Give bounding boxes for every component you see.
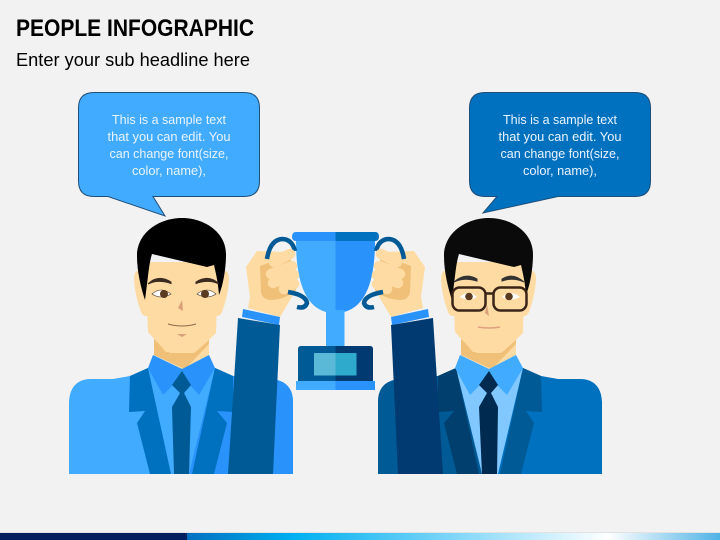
palm shadow (260, 255, 296, 300)
left man suit (69, 368, 293, 474)
cuff (391, 309, 429, 325)
trophy base (296, 346, 375, 390)
right arm and hand (364, 239, 443, 474)
trophy (292, 232, 379, 390)
speech bubble: right: This is a sample text (503, 113, 618, 127)
speech bubble: right: color, name), (523, 164, 597, 178)
trophy handle top (376, 239, 404, 259)
speech bubble: left (78, 92, 260, 216)
right man head (441, 218, 536, 369)
footer bar (0, 532, 720, 540)
palm shadow (375, 255, 411, 300)
speech bubble: right (470, 92, 650, 213)
title: PEOPLE INFOGRAPHIC (16, 15, 254, 42)
trophy rim (292, 232, 379, 241)
fingers (271, 254, 294, 289)
trophy handle bottom (364, 292, 383, 308)
speech bubble: left: that you can edit. You (108, 130, 231, 144)
left man head (134, 218, 229, 369)
trophy handle bottom (288, 292, 307, 308)
speech bubble: right: can change font(size, (500, 147, 620, 161)
speech bubble: right: that you can edit. You (498, 130, 622, 144)
trophy cup (296, 240, 336, 312)
trophy handle top (267, 239, 295, 259)
hand (246, 251, 296, 317)
right man face details and glasses (452, 276, 526, 328)
speech bubble: left: This is a sample text (112, 113, 227, 127)
sleeve (391, 318, 443, 474)
left man collar (148, 355, 215, 395)
hand (375, 251, 425, 317)
trophy stem (326, 310, 344, 347)
speech bubble: left: can change font(size, (110, 147, 228, 161)
sleeve (228, 318, 280, 474)
right man tie (479, 371, 498, 474)
speech bubble: left: color, name), (132, 164, 206, 178)
cuff (242, 309, 280, 325)
left arm and hand (228, 239, 307, 474)
man: right (378, 218, 602, 474)
right man collar (455, 355, 523, 395)
subtitle: Enter your sub headline here (16, 49, 250, 70)
left man tie (172, 371, 191, 474)
right man suit (378, 368, 602, 474)
fingers (377, 254, 400, 289)
man: left (69, 218, 293, 474)
